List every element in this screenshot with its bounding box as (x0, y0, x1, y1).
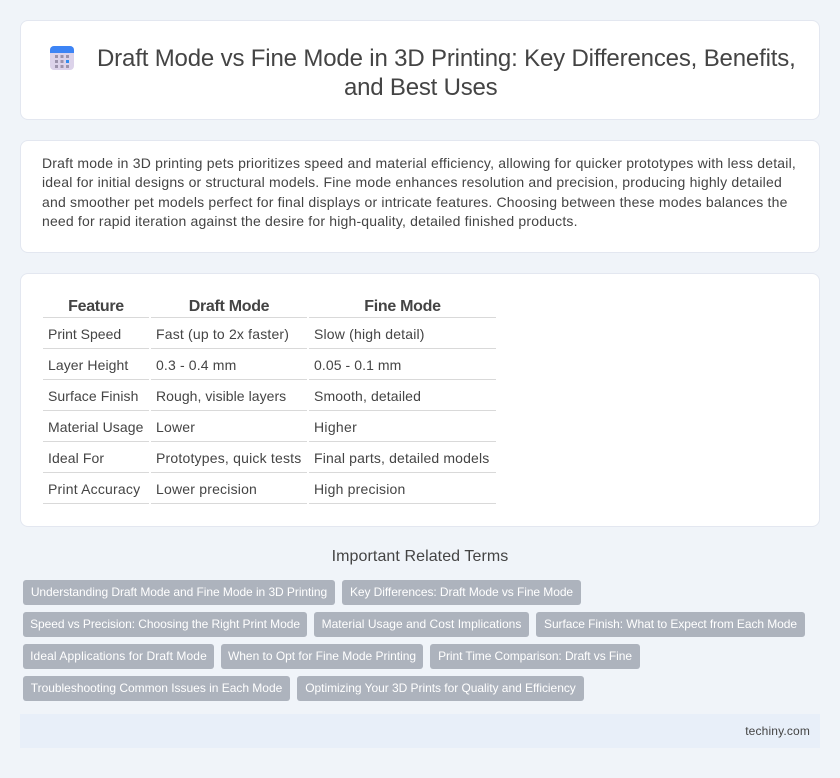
row: print speed: Print Speed (48, 326, 121, 342)
tag: Optimizing Your 3D Prints for Quality and Efficiency (305, 681, 576, 695)
tag (23, 644, 214, 669)
tag (23, 676, 290, 701)
title: and Best Uses (344, 74, 497, 101)
title: Draft Mode vs Fine Mode in 3D Printing: Key Differences, Benefits, (97, 45, 796, 72)
tag: Key Differences: Draft Mode vs Fine Mode (350, 585, 573, 599)
footer: site credit: techiny.com (745, 724, 810, 738)
tag (23, 580, 335, 605)
tag: When to Opt for Fine Mode Printing (228, 649, 416, 663)
tag: Print Time Comparison: Draft vs Fine (438, 649, 632, 663)
row: layer height: 0.3 - 0.4 mm (156, 357, 236, 373)
row: ideal for: Prototypes, quick tests (156, 450, 301, 466)
footer: site credit (20, 714, 820, 748)
title (97, 45, 796, 101)
panel: comparison table (20, 273, 820, 527)
related term tags (23, 580, 805, 701)
row: surface finish: Surface Finish (48, 388, 138, 404)
tag: Ideal Applications for Draft Mode (30, 649, 207, 663)
tag (314, 612, 529, 637)
row: print speed (48, 326, 425, 342)
row: print accuracy: Print Accuracy (48, 481, 140, 497)
text block: introduction paragraph: Draft mode in 3D printing pets prioritizes speed and material efficiency, allowing for quicker prototypes with less detail, (42, 155, 796, 171)
row: print speed: Slow (high detail) (314, 326, 425, 342)
tag: Understanding Draft Mode and Fine Mode in 3D Printing (31, 585, 327, 599)
row: print speed: Fast (up to 2x faster) (156, 326, 289, 342)
table header row: Draft Mode (189, 298, 269, 315)
text block: introduction paragraph: and smoother pet models perfect for final displays or intricate features. Choosing between these modes balances the (42, 194, 788, 210)
row: ideal for: Ideal For (48, 450, 104, 466)
text block: introduction paragraph (42, 155, 796, 229)
row: ideal for: Final parts, detailed models (314, 450, 489, 466)
comparison table (43, 298, 496, 504)
tag (536, 612, 805, 637)
row: layer height (48, 357, 401, 373)
row: ideal for (48, 450, 489, 466)
tag (342, 580, 581, 605)
text block: introduction paragraph: need for rapid iteration against the desire for high-quality, detailed finished products. (42, 213, 578, 229)
tag: Speed vs Precision: Choosing the Right Print Mode (30, 617, 300, 631)
heading: important related terms: Important Related Terms (332, 548, 508, 565)
tag (430, 644, 640, 669)
tag (23, 612, 307, 637)
row: material usage: Material Usage (48, 419, 144, 435)
row: print accuracy: High precision (314, 481, 406, 497)
table header row (68, 298, 441, 315)
row: print accuracy: Lower precision (156, 481, 257, 497)
row: material usage: Higher (314, 419, 357, 435)
tag: Troubleshooting Common Issues in Each Mode (31, 681, 282, 695)
icon: calendar (50, 46, 74, 70)
table header row: Feature (68, 298, 124, 315)
row: layer height: Layer Height (48, 357, 128, 373)
row: surface finish (48, 388, 421, 404)
panel: introduction (20, 140, 820, 253)
row: material usage (48, 419, 357, 435)
tag: Surface Finish: What to Expect from Each Mode (544, 617, 797, 631)
row: material usage: Lower (156, 419, 195, 435)
row: layer height: 0.05 - 0.1 mm (314, 357, 401, 373)
row: surface finish: Rough, visible layers (156, 388, 286, 404)
tag: Material Usage and Cost Implications (322, 617, 521, 631)
tag (221, 644, 423, 669)
row: print accuracy (48, 481, 406, 497)
panel: title header (20, 20, 820, 120)
row: surface finish: Smooth, detailed (314, 388, 421, 404)
text block: introduction paragraph: ideal for initial designs or structural models. Fine mode enhances resolution and precision, producing highly detailed (42, 174, 782, 190)
table header row: Fine Mode (364, 298, 441, 315)
tag (297, 676, 584, 701)
